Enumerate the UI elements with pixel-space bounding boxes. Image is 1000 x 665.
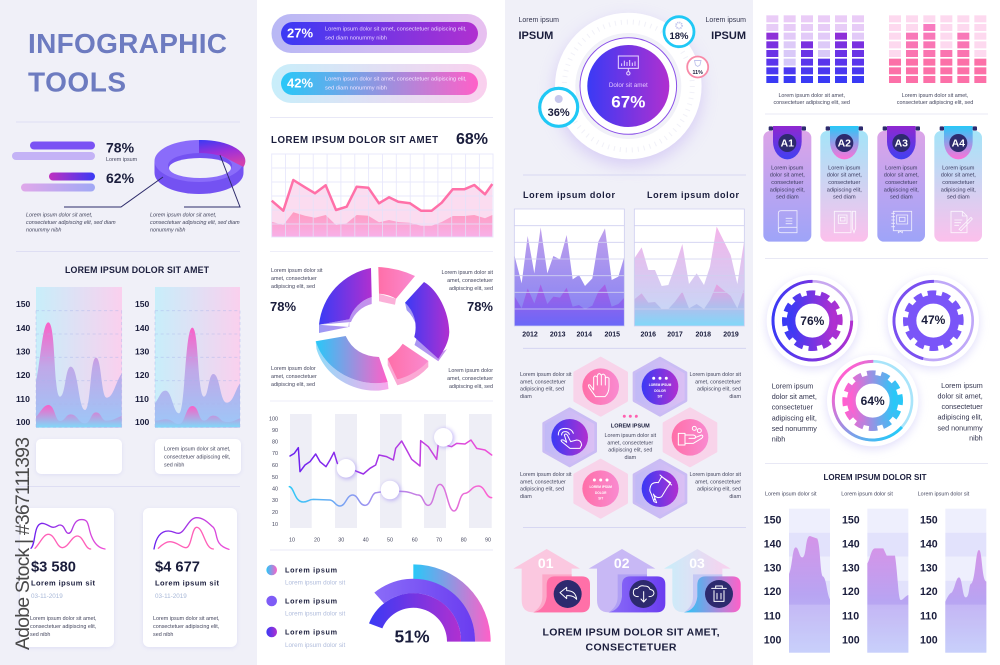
title bbox=[28, 28, 227, 98]
arrow blocks: 01 bbox=[538, 555, 554, 571]
multi-line chart: 60 bbox=[272, 463, 278, 469]
gear captions: adipiscing elit, bbox=[772, 413, 817, 422]
multi-line chart: 80 bbox=[461, 538, 467, 544]
donut captions: amet, consectetuer bbox=[447, 278, 493, 284]
banded area charts: 130 bbox=[764, 563, 781, 575]
area chart 2012-2015 bbox=[514, 209, 624, 338]
tab cards: sed diam bbox=[833, 195, 856, 201]
banded area charts: 130 bbox=[842, 563, 860, 575]
area charts with axis bbox=[16, 287, 240, 428]
icon: hand bbox=[589, 374, 609, 397]
donut captions: adipiscing elit, sed bbox=[271, 284, 315, 290]
arrow 03 bbox=[664, 549, 741, 612]
area charts with axis: 110 bbox=[135, 394, 149, 404]
card: $4 677: Lorem ipsum sit bbox=[155, 578, 220, 588]
gear 47% bbox=[885, 272, 982, 369]
dial labels: IPSUM bbox=[711, 30, 746, 42]
legend: Lorem ipsum dolor sit bbox=[285, 580, 345, 586]
gear 64% bbox=[817, 345, 928, 456]
hexagon diagram bbox=[544, 358, 716, 517]
banded area charts: 100 bbox=[842, 634, 860, 646]
gear captions: nibh bbox=[969, 434, 983, 443]
arrow blocks: 03 bbox=[689, 555, 705, 571]
exploded 3D donut chart bbox=[316, 267, 449, 391]
donut captions: amet, consectetuer bbox=[271, 276, 317, 282]
tab cards: adipiscing elit, bbox=[941, 187, 976, 193]
central radial dial: 67% bbox=[611, 92, 645, 112]
bubble: 18%: 18% bbox=[669, 31, 689, 42]
central radial dial bbox=[554, 13, 702, 166]
pill: 42%: Lorem ipsum dolor sit amet, consectetuer adipiscing elit, bbox=[325, 76, 467, 82]
hexagon side notes: adipiscing elit, sed bbox=[697, 487, 741, 493]
hexagon side notes: Lorem ipsum dolor sit bbox=[689, 472, 742, 478]
card: $3 580: consectetuer adipiscing elit, bbox=[30, 624, 97, 630]
banded area charts bbox=[764, 491, 986, 653]
icon: trash bbox=[712, 586, 726, 601]
gauge chart bbox=[369, 564, 491, 646]
gear captions: nibh bbox=[772, 434, 785, 443]
hexagon side notes: diam bbox=[520, 494, 532, 500]
note boxes: Lorem ipsum dolor sit amet, bbox=[164, 446, 231, 452]
closing heading: LOREM IPSUM DOLOR SIT AMET, bbox=[542, 626, 720, 638]
panel: second column bbox=[266, 14, 494, 649]
panel: fourth column bbox=[763, 15, 988, 653]
dial labels: Lorem ipsum bbox=[518, 17, 559, 24]
banded area charts: Lorem ipsum dolor sit bbox=[841, 491, 893, 497]
icon: megaphone bbox=[650, 475, 672, 503]
bubble: 36% bbox=[540, 88, 578, 126]
icon: pointer hand bbox=[558, 428, 582, 448]
banded area charts: Lorem ipsum dolor sit bbox=[765, 491, 817, 497]
area charts with axis: 120 bbox=[135, 370, 150, 380]
banded area charts: 100 bbox=[764, 634, 781, 646]
donut captions: adipiscing elit, sed bbox=[449, 286, 493, 292]
pill: 27% bbox=[272, 14, 487, 53]
hexagon side notes: Lorem ipsum dolor sit bbox=[689, 372, 742, 378]
area charts with axis: 150 bbox=[16, 299, 31, 309]
card: $4 677 bbox=[143, 508, 237, 648]
pink bar matrix bbox=[889, 15, 986, 106]
card: $4 677: consectetuer adipiscing elit, bbox=[153, 624, 220, 630]
banded area charts: 120 bbox=[764, 586, 781, 598]
hexagon side notes: Lorem ipsum dolor sit bbox=[520, 472, 572, 478]
note boxes: sed nibh bbox=[164, 462, 184, 468]
hexagon center note: Lorem ipsum dolor sit bbox=[605, 433, 657, 439]
legend: Lorem ipsum dolor sit bbox=[285, 611, 345, 618]
icon: back arrow bbox=[560, 587, 577, 599]
area charts with axis: 100 bbox=[135, 417, 150, 427]
multi-line chart: 60 bbox=[412, 538, 418, 544]
area chart 2016-2019: 2019 bbox=[723, 332, 739, 338]
hexagon diagram: DOLOR bbox=[654, 389, 666, 393]
area charts with axis: 150 bbox=[135, 299, 150, 309]
bubble: 11% bbox=[687, 56, 708, 78]
card A4 bbox=[934, 126, 982, 242]
card: $3 580 bbox=[20, 508, 114, 648]
gear captions: dolor sit amet, bbox=[938, 391, 983, 400]
tab cards: adipiscing elit, bbox=[770, 187, 805, 193]
hexagon side notes bbox=[520, 372, 742, 500]
banded area charts: 130 bbox=[920, 563, 938, 575]
multi-line chart: 40 bbox=[363, 538, 369, 544]
tab cards: Lorem ipsum bbox=[828, 165, 861, 171]
banded area charts: 100 bbox=[920, 634, 938, 646]
donut captions: Lorem ipsum dolor bbox=[271, 366, 316, 372]
purple bar matrix: Lorem ipsum dolor sit amet, bbox=[778, 93, 845, 99]
card: $4 677: Lorem ipsum dolor sit amet, bbox=[153, 616, 220, 622]
dial labels: Lorem ipsum bbox=[706, 17, 746, 24]
legend: Lorem ipsum bbox=[285, 596, 337, 606]
progress bars: Lorem ipsum bbox=[106, 157, 138, 163]
card: $4 677: 03-11-2019 bbox=[155, 593, 187, 600]
hexagon side notes: diam bbox=[729, 494, 742, 500]
chart headings: Lorem ipsum dolor bbox=[523, 190, 615, 200]
multi-line chart: 80 bbox=[272, 440, 278, 446]
tab cards: adipiscing elit, bbox=[884, 187, 919, 193]
dial labels bbox=[518, 17, 746, 42]
hexagon diagram: DOLOR bbox=[595, 491, 607, 495]
side faces bbox=[316, 294, 447, 391]
gear captions: dolor sit amet, bbox=[772, 392, 817, 401]
legend: Lorem ipsum bbox=[285, 566, 337, 574]
banded area charts: Lorem ipsum dolor sit bbox=[918, 491, 970, 497]
tab cards: consectetuer bbox=[885, 180, 917, 186]
gear captions: adipiscing elit, bbox=[938, 413, 983, 422]
area chart 2016-2019: 2017 bbox=[667, 332, 683, 338]
hexagon side notes: adipiscing elit, sed bbox=[520, 387, 564, 393]
gear captions: consectetuer bbox=[772, 403, 813, 412]
3D ring chart bbox=[64, 140, 245, 207]
area charts with axis: 110 bbox=[16, 394, 30, 404]
purple bar matrix bbox=[766, 15, 864, 106]
donut captions: Lorem ipsum dolor bbox=[448, 368, 493, 374]
hexagon side notes: adipiscing elit, sed bbox=[520, 487, 564, 493]
tab cards: dolor sit amet, bbox=[770, 173, 805, 179]
tab cards: dolor sit amet, bbox=[941, 173, 976, 179]
tab cards: Lorem ipsum bbox=[885, 165, 918, 171]
ring chart captions: nonummy nibh bbox=[150, 228, 185, 234]
hexagon side notes: diam bbox=[520, 394, 532, 400]
hexagon side notes: Lorem ipsum dolor sit bbox=[520, 372, 572, 378]
card: $3 580: Lorem ipsum sit bbox=[31, 578, 96, 588]
title: TOOLS bbox=[28, 66, 126, 98]
multi-line chart: 50 bbox=[272, 475, 278, 481]
ring chart captions: Lorem ipsum dolor sit amet, bbox=[150, 212, 217, 218]
icon: coins bbox=[692, 426, 701, 433]
pill: 42% bbox=[272, 64, 487, 103]
donut captions: adipiscing elit, sed bbox=[449, 384, 493, 390]
area charts with axis: 100 bbox=[16, 417, 31, 427]
gear captions: Lorem ipsum bbox=[772, 382, 813, 391]
arrow blocks bbox=[513, 549, 741, 612]
hexagon diagram: SIT bbox=[658, 394, 663, 398]
card A1 bbox=[763, 126, 811, 242]
stock watermark: Adobe Stock | #367111393 bbox=[12, 437, 34, 650]
multi-line chart: 10 bbox=[272, 522, 278, 528]
hexagon side notes: adipiscing elit, sed bbox=[697, 387, 741, 393]
legend: Lorem ipsum bbox=[285, 628, 337, 637]
hexagon side notes: diam bbox=[729, 394, 742, 400]
tab cards: consectetuer bbox=[828, 180, 860, 186]
card: $3 580: sed nibh bbox=[30, 632, 50, 638]
legend: Lorem ipsum dolor sit bbox=[285, 642, 345, 649]
banded area charts: 110 bbox=[764, 610, 781, 622]
chart headings bbox=[523, 190, 739, 200]
note boxes: consectetuer adipiscing elit, bbox=[164, 454, 231, 460]
donut captions: Lorem ipsum dolor sit bbox=[441, 270, 494, 276]
card A2 bbox=[820, 126, 868, 242]
arrow 02 bbox=[589, 549, 665, 612]
tab cards: sed diam bbox=[947, 195, 970, 201]
gear dials: 47% bbox=[921, 313, 946, 327]
gear captions: consectetuer bbox=[942, 402, 983, 411]
tab cards: consectetuer bbox=[942, 180, 974, 186]
donut captions bbox=[270, 268, 494, 390]
hexagon diagram: LOREM IPSUM bbox=[649, 383, 672, 387]
area chart 2016-2019 bbox=[634, 209, 744, 338]
legend bbox=[266, 565, 345, 649]
area charts with axis: 130 bbox=[135, 346, 150, 356]
arrow blocks: 02 bbox=[614, 555, 630, 571]
tab cards: dolor sit amet, bbox=[827, 173, 862, 179]
card A3 bbox=[877, 126, 925, 242]
pill: 27%: Lorem ipsum dolor sit amet, consectetuer adipiscing elit, bbox=[325, 26, 467, 32]
heading: LOREM IPSUM DOLOR SIT bbox=[824, 473, 927, 482]
heading with value: 68% bbox=[456, 131, 488, 148]
bubble: 18% bbox=[664, 17, 694, 47]
title: INFOGRAPHIC bbox=[28, 28, 227, 59]
banded area charts: 140 bbox=[842, 539, 860, 551]
area chart 2012-2015: 2015 bbox=[605, 332, 620, 338]
note boxes bbox=[36, 439, 241, 475]
tab cards bbox=[763, 126, 982, 242]
banded area charts: 140 bbox=[920, 539, 938, 551]
ring chart captions: Lorem ipsum dolor sit amet, bbox=[26, 212, 93, 218]
gear captions bbox=[772, 381, 983, 443]
heading: LOREM IPSUM DOLOR SIT AMET bbox=[65, 265, 210, 275]
panel: left column bbox=[12, 28, 245, 648]
area charts with axis: 130 bbox=[16, 346, 31, 356]
ring chart captions: consectetuer adipiscing elit, sed diam bbox=[26, 220, 116, 226]
pink bar matrix: Lorem ipsum dolor sit amet, bbox=[902, 93, 969, 99]
hexagon center note: amet, consectetuer bbox=[607, 440, 653, 446]
area chart 2016-2019: 2016 bbox=[641, 332, 656, 338]
multi-line chart: 40 bbox=[272, 486, 278, 492]
multi-line chart: 20 bbox=[314, 538, 320, 544]
multi-line chart: 100 bbox=[269, 416, 278, 422]
donut captions: Lorem ipsum dolor sit bbox=[271, 268, 323, 274]
pill: 27%: sed diam nonummy nibh bbox=[325, 36, 387, 42]
tab cards: adipiscing elit, bbox=[827, 187, 862, 193]
hexagon center note: adipiscing elit, sed bbox=[608, 448, 652, 454]
progress bars: 62% bbox=[106, 170, 135, 186]
multi-line chart: 70 bbox=[272, 451, 278, 457]
progress bars bbox=[12, 140, 138, 192]
pill: 27%: 27% bbox=[287, 26, 313, 40]
icon: presentation board bbox=[618, 56, 638, 75]
heading with value: LOREM IPSUM DOLOR SIT AMET bbox=[271, 135, 438, 146]
gear dials: 76% bbox=[800, 314, 825, 328]
banded area charts: 140 bbox=[764, 539, 781, 551]
hexagon center note: LOREM IPSUM bbox=[611, 424, 650, 430]
ring chart captions: nonummy nibh bbox=[26, 228, 61, 234]
ring chart captions bbox=[26, 212, 240, 234]
banded area charts: 120 bbox=[842, 586, 860, 598]
card: $4 677: sed nibh bbox=[153, 632, 173, 638]
multi-line chart: 30 bbox=[338, 538, 344, 544]
gear dials: 64% bbox=[861, 394, 885, 408]
area chart 2012-2015: 2014 bbox=[577, 332, 592, 338]
multi-line chart: 90 bbox=[272, 428, 278, 434]
donut captions: amet, consectetuer bbox=[447, 376, 493, 382]
multi-line chart: 10 bbox=[289, 538, 295, 544]
donut captions: 78% bbox=[270, 299, 296, 314]
tab cards: A4 bbox=[952, 138, 965, 150]
gear captions: sed nonummy bbox=[938, 423, 983, 432]
tab cards: consectetuer bbox=[771, 180, 803, 186]
banded area charts: 110 bbox=[920, 610, 937, 622]
tab cards: Lorem ipsum bbox=[942, 165, 975, 171]
tab cards: A2 bbox=[838, 138, 851, 150]
multi-line chart: 20 bbox=[272, 510, 278, 516]
hexagon center note bbox=[605, 415, 657, 461]
area charts with axis: 120 bbox=[16, 370, 31, 380]
purple bar matrix: consectetuer adipiscing elit, sed bbox=[773, 100, 850, 106]
tab cards: A1 bbox=[781, 138, 794, 150]
banded area charts: 120 bbox=[920, 586, 938, 598]
donut captions: 78% bbox=[467, 299, 493, 314]
area chart 2012-2015: 2013 bbox=[550, 332, 566, 338]
banded area charts: 150 bbox=[920, 514, 938, 526]
gear captions: Lorem ipsum bbox=[941, 381, 983, 390]
bubble: 11%: 11% bbox=[693, 70, 703, 76]
banded area charts: 150 bbox=[842, 514, 860, 526]
closing heading: CONSECTETUER bbox=[586, 642, 677, 654]
multi-line chart bbox=[269, 414, 492, 544]
tab cards: dolor sit amet, bbox=[884, 173, 919, 179]
donut captions: amet, consectetuer bbox=[271, 374, 317, 380]
tab cards: A3 bbox=[895, 138, 908, 150]
heading with value bbox=[271, 131, 488, 148]
closing heading bbox=[542, 626, 720, 654]
icon: cloud download bbox=[633, 586, 654, 602]
hexagon side notes: amet, consectetuer bbox=[520, 479, 566, 485]
card: $4 677: $4 677 bbox=[155, 560, 200, 576]
gauge chart: 51% bbox=[394, 626, 430, 646]
hexagon side notes: amet, consectetuer bbox=[520, 379, 566, 385]
bubble: 36%: 36% bbox=[548, 107, 570, 119]
progress bars: 78% bbox=[106, 140, 135, 156]
tab cards: sed diam bbox=[776, 195, 799, 201]
tab cards: Lorem ipsum bbox=[771, 165, 804, 171]
hexagon diagram: LOREM IPSUM bbox=[589, 485, 612, 489]
dial labels: IPSUM bbox=[518, 30, 553, 42]
multi-line chart: 90 bbox=[485, 538, 491, 544]
line and area chart bbox=[272, 154, 493, 237]
pill: 42%: sed diam nonummy nibh bbox=[325, 86, 387, 92]
banded area charts: 110 bbox=[842, 610, 859, 622]
card: $3 580: 03-11-2019 bbox=[31, 593, 63, 600]
hexagon side notes: amet, consectetuer bbox=[695, 479, 741, 485]
banded area charts: 150 bbox=[764, 514, 781, 526]
arrow 01 bbox=[513, 549, 590, 612]
gear dials bbox=[767, 272, 982, 456]
area charts with axis: 140 bbox=[16, 323, 31, 333]
hexagon diagram: SIT bbox=[598, 496, 603, 500]
pill: 42%: 42% bbox=[287, 76, 313, 90]
donut captions: adipiscing elit, sed bbox=[271, 382, 315, 388]
gear captions: sed nonummy bbox=[772, 424, 817, 433]
central radial dial: Dolor sit amet bbox=[609, 82, 648, 89]
icon: giving hand bbox=[678, 433, 703, 445]
multi-line chart: 50 bbox=[387, 538, 393, 544]
area chart 2016-2019: 2018 bbox=[696, 332, 711, 338]
card: $3 580: Lorem ipsum dolor sit amet, bbox=[30, 616, 97, 622]
chart headings: Lorem ipsum dolor bbox=[647, 190, 739, 200]
hexagon center note: diam bbox=[624, 455, 637, 461]
multi-line chart: 30 bbox=[272, 498, 278, 504]
gear 76% bbox=[767, 275, 858, 366]
hexagon side notes: amet, consectetuer bbox=[695, 379, 741, 385]
area chart 2012-2015: 2012 bbox=[522, 332, 538, 338]
pink bar matrix: consectetuer adipiscing elit, sed bbox=[897, 100, 973, 106]
area charts with axis: 140 bbox=[135, 323, 150, 333]
card: $3 580: $3 580 bbox=[31, 560, 76, 576]
tab cards: sed diam bbox=[890, 195, 913, 201]
panel: third column bbox=[513, 13, 746, 653]
ring chart captions: consectetuer adipiscing elit, sed diam bbox=[150, 220, 240, 226]
multi-line chart: 70 bbox=[436, 538, 442, 544]
